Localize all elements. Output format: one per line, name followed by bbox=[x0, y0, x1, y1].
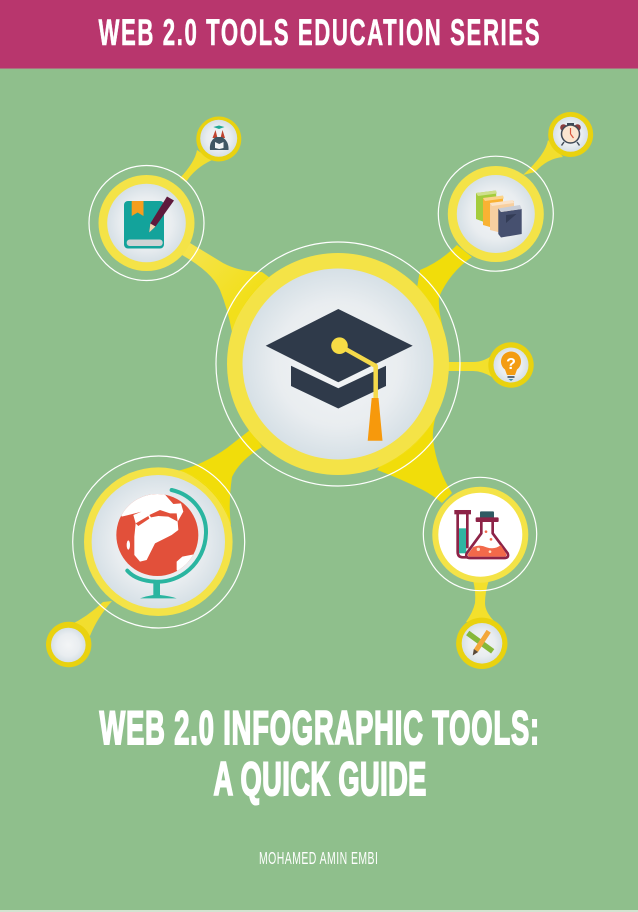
icon: question bulb: ? bbox=[506, 356, 516, 373]
node: stack of books bbox=[438, 156, 553, 271]
connectors between nodes bbox=[70, 140, 563, 636]
main title: A QUICK GUIDE bbox=[214, 753, 426, 806]
icon: clock bbox=[560, 123, 581, 146]
icon: books bbox=[476, 190, 522, 238]
author: MOHAMED AMIN EMBI bbox=[259, 849, 378, 869]
main title: WEB 2.0 INFOGRAPHIC TOOLS: bbox=[100, 702, 539, 755]
node: small empty circle bbox=[46, 622, 91, 667]
node: small lightbulb bbox=[488, 342, 534, 388]
icon: mortarboard bbox=[266, 309, 413, 441]
node: graduation cap (main) bbox=[216, 242, 460, 486]
icon: book bbox=[124, 196, 174, 248]
node: small graduate reader bbox=[196, 116, 241, 162]
icon: graduate with open book bbox=[210, 126, 229, 150]
node: book and pencil bbox=[89, 166, 204, 280]
header title: WEB 2.0 TOOLS EDUCATION SERIES bbox=[98, 12, 540, 53]
main title bbox=[100, 702, 539, 806]
icon: test tube and flask bbox=[454, 510, 508, 558]
icon: pencil and ruler bbox=[468, 631, 493, 656]
node: small pencil and ruler bbox=[456, 618, 507, 669]
node: small alarm clock bbox=[548, 112, 593, 157]
node: globe bbox=[73, 456, 245, 628]
header band bbox=[0, 0, 638, 69]
node: lab flask bbox=[423, 477, 537, 591]
icon: globe on stand bbox=[116, 488, 206, 598]
